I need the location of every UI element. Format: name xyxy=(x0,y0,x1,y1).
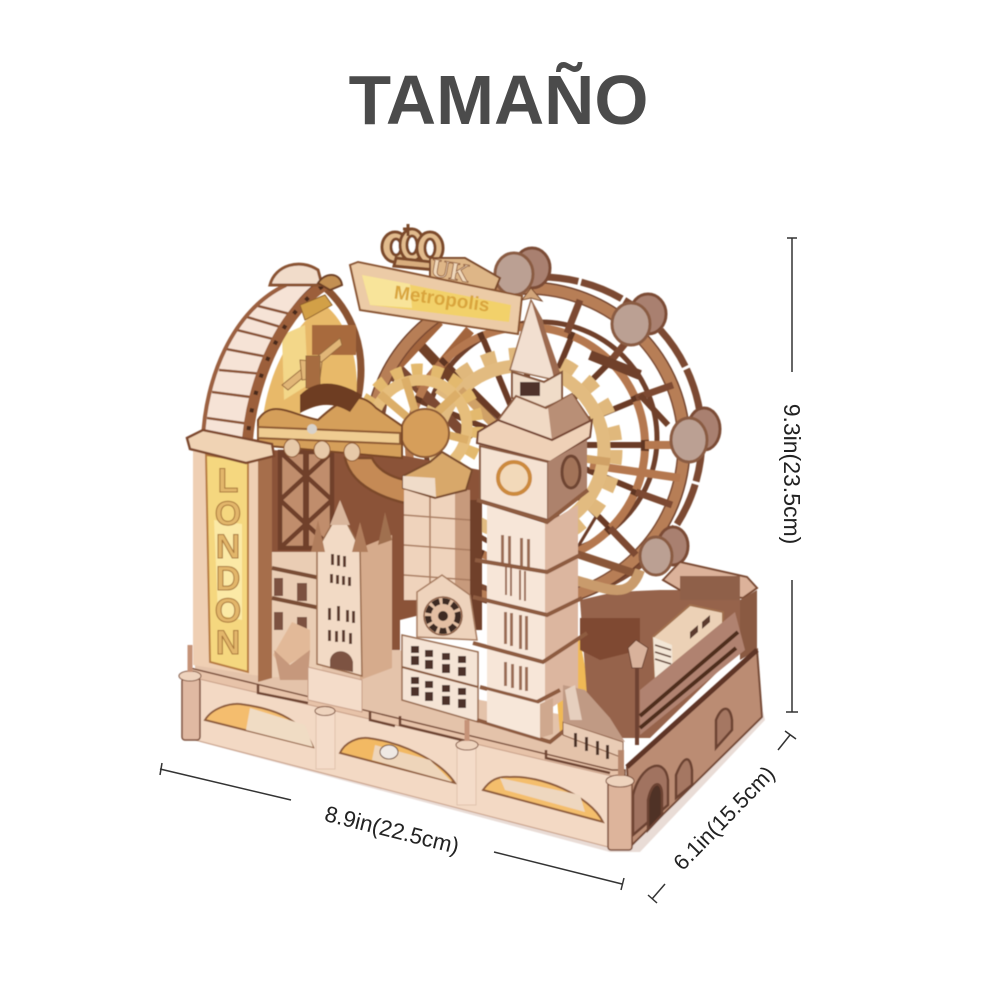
belfry xyxy=(512,372,562,408)
shaft ledges xyxy=(473,490,588,742)
rear deck floor xyxy=(195,650,625,780)
spires xyxy=(311,520,325,552)
Parliament tower and building xyxy=(402,452,482,722)
central stone pier xyxy=(308,667,362,712)
wheel back ring xyxy=(380,277,702,599)
arch top knob xyxy=(270,264,322,285)
wheel connectors xyxy=(565,300,683,575)
rear buildings xyxy=(272,552,322,677)
dimension: width: 8.9in(22.5cm) xyxy=(322,801,462,859)
column xyxy=(404,490,470,600)
arch interior glow xyxy=(262,305,357,435)
sign panel xyxy=(362,275,511,322)
building windows xyxy=(411,646,466,708)
dimension: width xyxy=(160,763,624,890)
deck gaps xyxy=(258,685,610,773)
gold gear front xyxy=(363,370,477,484)
LONDON lettering: O xyxy=(215,495,241,533)
gable xyxy=(417,575,477,640)
swirl marble track xyxy=(345,458,440,508)
track curl xyxy=(575,570,640,590)
column middle xyxy=(315,706,335,769)
crown xyxy=(382,224,443,270)
base xyxy=(179,645,762,850)
column corner xyxy=(606,750,634,850)
LONDON lettering: N xyxy=(216,528,240,566)
dimension: height: 9.3in(23.5cm) xyxy=(779,404,805,544)
shaft slits xyxy=(501,535,530,722)
railing xyxy=(640,632,738,728)
arch inner rib xyxy=(247,282,330,448)
tower roof slab xyxy=(187,430,274,463)
steel lattice truss xyxy=(280,452,332,548)
lit backdrop xyxy=(282,325,308,400)
side wing xyxy=(360,535,392,680)
parapet xyxy=(477,420,592,462)
small airplane xyxy=(300,295,332,320)
large gold gear behind clock tower xyxy=(426,356,614,544)
London light tower xyxy=(187,430,274,682)
arch planks xyxy=(203,283,318,442)
sign: UK xyxy=(429,253,473,288)
LONDON lettering: D xyxy=(216,560,240,598)
base side face xyxy=(627,650,762,845)
wooden London model xyxy=(179,224,765,852)
train xyxy=(653,605,723,685)
LONDON lettering: N xyxy=(216,624,240,662)
base top ledge xyxy=(190,668,625,778)
sign text: Metropolis xyxy=(393,282,491,317)
column right xyxy=(456,720,478,805)
wheel inner ring xyxy=(409,327,645,563)
LONDON lettering xyxy=(215,462,241,662)
marble track xyxy=(258,383,402,461)
base front face xyxy=(195,678,612,848)
column left xyxy=(179,645,201,740)
side arches xyxy=(633,709,732,835)
lit interior beside clock tower xyxy=(553,640,595,735)
lit arches xyxy=(205,704,603,822)
lower shaft xyxy=(487,690,540,738)
title: TAMAÑO xyxy=(349,61,648,139)
glowing panel xyxy=(206,455,248,672)
deck xyxy=(640,612,745,735)
spire xyxy=(510,300,555,380)
tower windows xyxy=(328,554,355,644)
Big Ben clock tower xyxy=(473,288,592,742)
left arch xyxy=(203,264,361,448)
ground shadow xyxy=(200,708,765,852)
Tower Bridge gothic tower xyxy=(272,500,392,680)
tower gate xyxy=(330,651,353,672)
clock stage xyxy=(480,446,548,520)
wheel capsules xyxy=(495,248,720,575)
sign xyxy=(350,224,522,334)
figures wall xyxy=(563,685,625,759)
building body xyxy=(402,635,478,722)
dark interior behind model xyxy=(270,450,480,680)
lamp post xyxy=(628,640,648,745)
dimension: depth xyxy=(648,731,796,903)
LONDON lettering: O xyxy=(215,592,241,630)
small house xyxy=(273,622,310,668)
tower shaft xyxy=(487,505,545,712)
LONDON lettering: L xyxy=(218,462,238,500)
wheel front outer rim xyxy=(370,288,684,602)
biplane xyxy=(282,338,342,390)
rose window xyxy=(424,597,462,635)
tower body xyxy=(193,450,272,678)
arch back frame xyxy=(322,285,361,398)
ferris wheel xyxy=(364,248,720,608)
tower front xyxy=(317,510,362,676)
dimension: depth: 6.1in(15.5cm) xyxy=(668,761,780,875)
sign plate xyxy=(350,262,522,334)
UK plate xyxy=(430,258,500,290)
right back platform xyxy=(575,562,757,745)
wheel spokes xyxy=(392,322,645,560)
upper roof xyxy=(498,394,590,442)
tiled roof xyxy=(403,452,472,498)
